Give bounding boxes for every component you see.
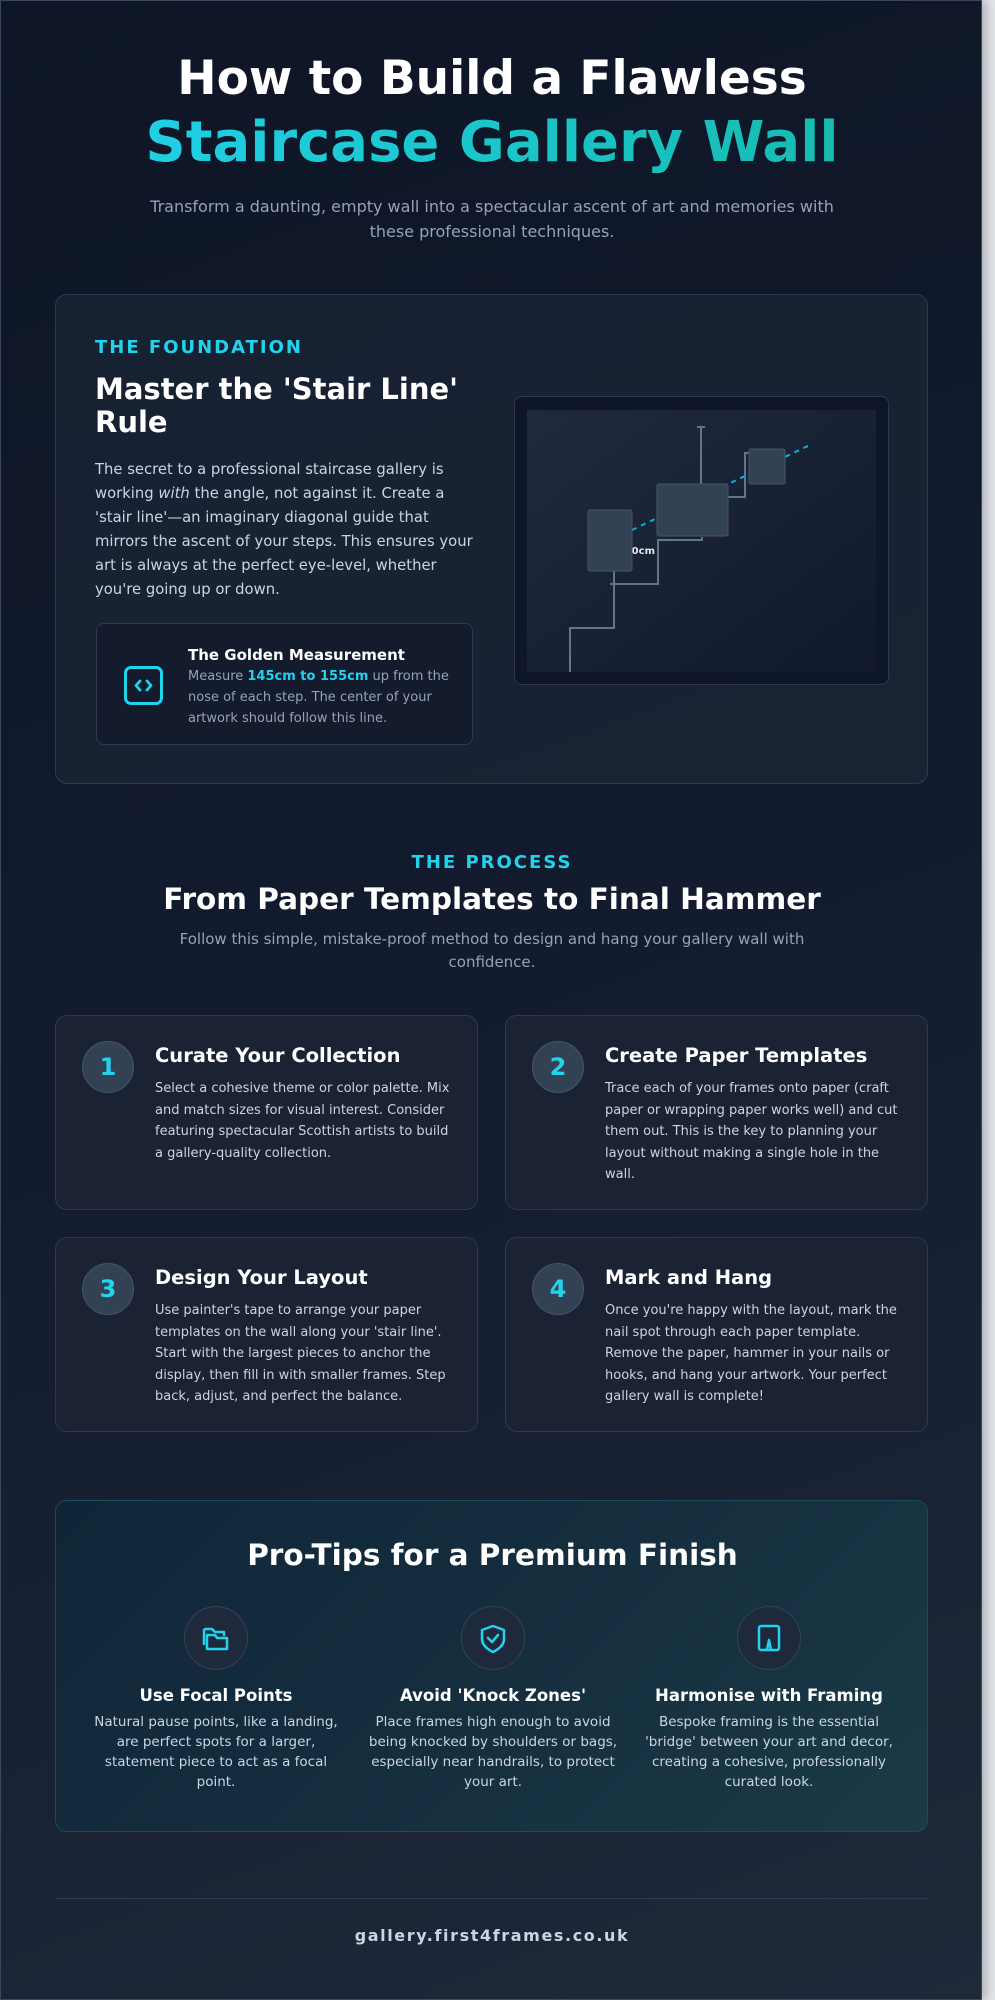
icon: code brackets	[124, 666, 163, 705]
step title: Create Paper Templates	[605, 1044, 867, 1067]
tip: focal points: Natural pause points, like a landing, are perfect spots for a larger, statement piece to act as a focal point.	[94, 1714, 338, 1790]
icon: number 3: 3	[100, 1275, 116, 1303]
heading: stair line rule: Master the 'Stair Line' Rule	[95, 372, 458, 439]
subtitle: Transform a daunting, empty wall into a spectacular ascent of art and memories with these professional techniques.	[150, 197, 834, 241]
title	[145, 51, 839, 175]
label: the process: THE PROCESS	[412, 852, 572, 873]
panel: step 1	[55, 1015, 478, 1210]
title: Staircase Gallery Wall	[145, 110, 839, 175]
icon: number 1: 1	[100, 1053, 116, 1081]
heading: process: From Paper Templates to Final Hammer	[163, 882, 821, 916]
label: the foundation: THE FOUNDATION	[95, 337, 303, 358]
callout title: The Golden Measurement	[188, 646, 405, 664]
icon: number 3	[82, 1263, 134, 1315]
callout text: Measure 145cm to 155cm up from the nose of each step. The center of your artwork should follow this line.	[188, 669, 449, 726]
icon: number 4: 4	[550, 1275, 566, 1303]
panel: foundation	[55, 294, 928, 784]
chart: stair line diagram	[514, 396, 889, 685]
icon: number 1	[82, 1041, 134, 1093]
step text: Use painter's tape to arrange your paper templates on the wall along your 'stair line'. Start with the largest pieces to anchor the display, then fill in with smaller frames. Step back, adjust, and perfect the balance.	[155, 1303, 446, 1404]
panel: step 2	[505, 1015, 928, 1210]
heading: pro tips: Pro-Tips for a Premium Finish	[247, 1538, 738, 1572]
step text: Trace each of your frames onto paper (craft paper or wrapping paper works well) and cut them out. This is the key to planning your layout without making a single hole in the wall.	[605, 1081, 898, 1182]
step title: Mark and Hang	[605, 1266, 772, 1289]
panel: step 3	[55, 1237, 478, 1432]
title: How to Build a Flawless	[177, 51, 807, 106]
step title: Curate Your Collection	[155, 1044, 400, 1067]
tip: knock zones: Avoid 'Knock Zones'	[400, 1686, 586, 1705]
panel: pro tips	[55, 1500, 928, 1832]
icon: number 4	[532, 1263, 584, 1315]
icon: number 2: 2	[550, 1053, 566, 1081]
tip: framing: Harmonise with Framing	[655, 1686, 883, 1705]
step text: Select a cohesive theme or color palette. Mix and match sizes for visual interest. Consider featuring spectacular Scottish artists to build a gallery-quality collection.	[155, 1081, 449, 1160]
step title: Design Your Layout	[155, 1266, 368, 1289]
icon: shield	[461, 1606, 525, 1670]
footer: website: gallery.first4frames.co.uk	[355, 1926, 629, 1945]
text block: stair line explanation: The secret to a professional staircase gallery is working with the angle, not against it. Create a 'stair line'—an imaginary diagonal guide that mirrors the ascent of your steps. This ensures your art is always at the perfect eye-level, whether you're going up or down.	[95, 461, 473, 598]
callout: golden measurement	[96, 623, 473, 745]
text block: process intro: Follow this simple, mistake-proof method to design and hang your gallery wall with confidence.	[180, 930, 804, 971]
tip: framing: Bespoke framing is the essential 'bridge' between your art and decor, creating a cohesive, professionally curated look.	[645, 1714, 893, 1790]
tip: focal points: Use Focal Points	[140, 1686, 292, 1705]
tip: knock zones: Place frames high enough to avoid being knocked by shoulders or bags, especially near handrails, to protect your art.	[369, 1714, 617, 1790]
icon: number 2	[532, 1041, 584, 1093]
chart: stair line diagram: 150cm	[618, 546, 655, 557]
step text: Once you're happy with the layout, mark the nail spot through each paper template. Remove the paper, hammer in your nails or hooks, and hang your artwork. Your perfect gallery wall is complete!	[605, 1303, 897, 1404]
icon: frame	[737, 1606, 801, 1670]
icon: folder	[184, 1606, 248, 1670]
panel: step 4	[505, 1237, 928, 1432]
